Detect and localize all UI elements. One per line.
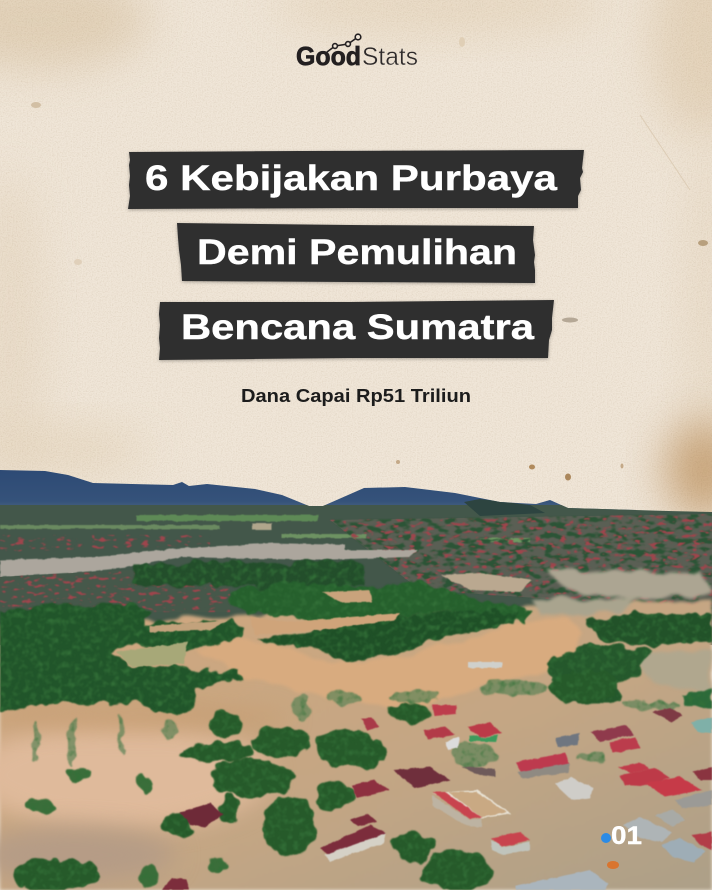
tape 1 bbox=[128, 150, 584, 209]
near left town bbox=[0, 570, 230, 612]
tape 1: 6 Kebijakan Purbaya bbox=[145, 159, 558, 198]
title tape stack bbox=[128, 150, 584, 360]
flood water bbox=[0, 570, 712, 890]
paper background bbox=[0, 0, 712, 520]
logo line chart icon bbox=[327, 34, 361, 52]
tape 3 bbox=[159, 300, 554, 360]
tape 2 bbox=[177, 223, 535, 283]
logo wordmark: Stats bbox=[362, 43, 418, 71]
page number: 01: 01 bbox=[611, 822, 642, 850]
orange float bbox=[607, 861, 619, 869]
green vegetation bbox=[0, 562, 712, 890]
tape 3: Bencana Sumatra bbox=[181, 308, 535, 347]
tan patches over vegetation bbox=[116, 573, 532, 667]
subtitle: Dana Capai Rp51 Triliun bbox=[241, 386, 471, 406]
mountains bbox=[0, 470, 635, 510]
page number: 01 bbox=[601, 822, 642, 850]
lake bbox=[0, 543, 418, 577]
photo: flooded town aerial view bbox=[0, 465, 712, 890]
walled compound bbox=[432, 790, 511, 827]
logo wordmark: Good bbox=[296, 41, 361, 71]
logo wordmark bbox=[296, 41, 418, 71]
far town and fields bbox=[0, 499, 712, 645]
tape 2: Demi Pemulihan bbox=[197, 233, 517, 272]
houses bbox=[161, 662, 712, 890]
logo: GoodStats bbox=[296, 34, 418, 71]
blue dot bbox=[601, 833, 611, 843]
